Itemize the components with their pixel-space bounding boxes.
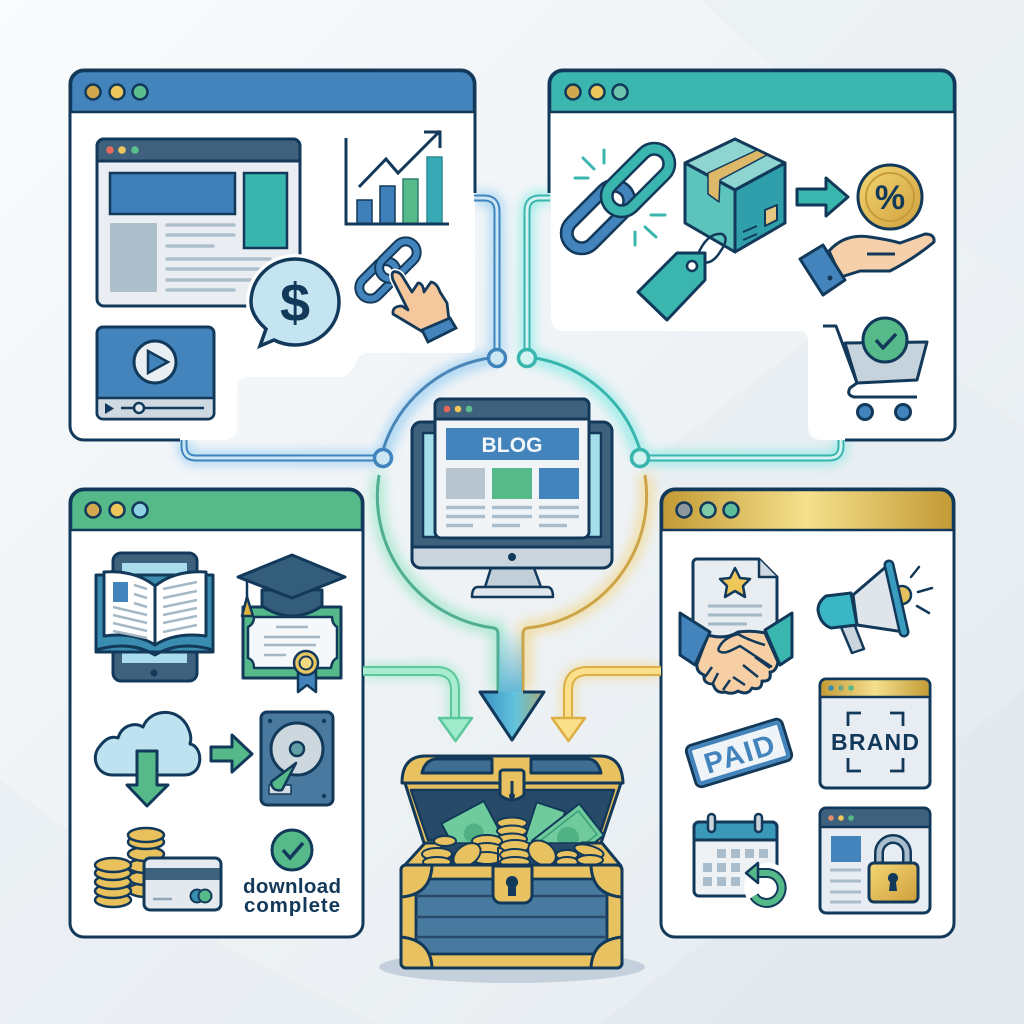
monitor stand [472, 568, 553, 597]
panel border [549, 70, 955, 440]
window dots [676, 502, 738, 518]
icon: web page with ad placements [97, 139, 300, 306]
icon: affiliate link with pointing hand [355, 237, 456, 342]
icon: hard drive [261, 712, 333, 805]
icon: cloud with download arrow [95, 712, 200, 806]
icon: contract and handshake [680, 559, 792, 693]
icon: percent coin: % [875, 179, 905, 217]
arrow: cloud to drive [211, 735, 252, 772]
icon: shopping cart with check [823, 318, 927, 420]
chest lid [402, 756, 623, 843]
icon: treasure chest [379, 756, 645, 983]
icon: dollar speech bubble: $ [280, 273, 310, 333]
icon: calendar with renew arrow [694, 814, 792, 911]
icon: brand page [820, 679, 930, 788]
icon: video player [97, 327, 214, 419]
panel: top right affiliate products [549, 70, 955, 440]
connector arc: gold to centre arrow [523, 475, 647, 692]
panel border [70, 70, 475, 440]
arrow: gold path into chest [552, 671, 661, 741]
central blog monitor [412, 399, 612, 597]
text: download complete: complete [244, 894, 340, 917]
panel body [70, 70, 475, 440]
icon: ebook on tablet [96, 553, 213, 681]
title bar [662, 490, 953, 530]
blog heading: BLOG [482, 434, 542, 457]
monitor frame [412, 422, 612, 568]
icon: paid stamp [685, 718, 793, 788]
text: download complete [243, 875, 341, 917]
icon: product box [685, 139, 785, 252]
icon: coins and payment card [95, 828, 221, 910]
icon: growth chart [346, 131, 449, 224]
icon: check circle [272, 830, 312, 870]
window dots [86, 502, 148, 518]
connector arc: green to centre arrow [377, 475, 498, 692]
icon: megaphone [818, 565, 932, 653]
icon: dollar speech bubble [246, 254, 344, 355]
window dots [86, 84, 148, 100]
text: download complete: download [243, 875, 341, 898]
window dots [566, 84, 628, 100]
panel body [661, 489, 954, 937]
cash and coins [404, 801, 621, 872]
chest body [401, 865, 622, 968]
title bar [550, 71, 954, 112]
connector lines: blue [184, 198, 506, 466]
icon: paid stamp: PAID [700, 729, 779, 781]
chest shadow [379, 951, 645, 983]
panel border [70, 489, 363, 937]
panel: top left display ads and affiliate links [70, 70, 475, 440]
title bar [71, 71, 474, 112]
arrow: product to commission [797, 178, 848, 216]
icon: open hand [800, 234, 934, 295]
panel body [70, 489, 363, 937]
connector lines: teal [518, 198, 841, 466]
connector glow halos [184, 198, 841, 725]
icon: graduation cap and diploma [238, 555, 345, 692]
title bar [71, 490, 362, 530]
arrow: centre arrow into chest [480, 628, 544, 740]
panel: bottom left digital products [70, 489, 363, 937]
arrow: green path into chest [363, 671, 472, 741]
panel border [661, 489, 954, 937]
blog page window [435, 399, 589, 538]
icon: locked page [820, 808, 930, 913]
panel body [551, 70, 955, 440]
panel: bottom right sponsorships [661, 489, 954, 937]
icon: price tag [638, 234, 726, 320]
icon: brand page: BRAND [831, 729, 919, 755]
icon: percent coin [858, 165, 922, 229]
icon: chain link with sparks [561, 143, 675, 254]
